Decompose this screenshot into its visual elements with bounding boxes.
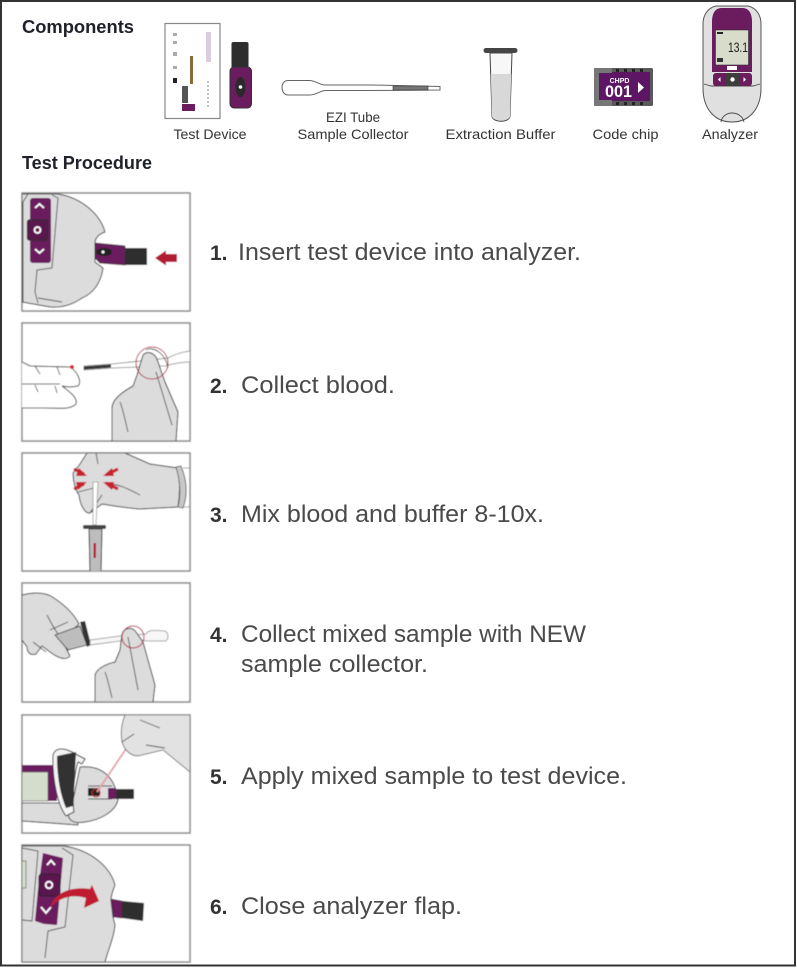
analyzer body <box>22 194 105 307</box>
analyzer buttons <box>35 853 63 925</box>
tilted tube <box>55 621 91 650</box>
step 4 text: Collect mixed sample with NEW <box>241 621 586 648</box>
left hand fingers <box>22 362 80 408</box>
buffer tube <box>83 525 106 572</box>
collector capillary band <box>393 86 428 90</box>
sample collector <box>96 748 126 794</box>
step 2 text: 2. <box>210 375 228 398</box>
arrow: close flap <box>50 885 99 908</box>
step 4 text: sample collector. <box>241 651 428 678</box>
glove cuff <box>176 466 186 508</box>
panel: step 6 illustration <box>22 845 190 962</box>
arrow: insert direction <box>155 250 177 266</box>
panel: step 2 illustration <box>22 323 190 441</box>
test device <box>111 899 144 921</box>
gloved hand <box>73 453 180 513</box>
collector tube drawing <box>282 80 440 95</box>
sample collector <box>90 630 168 645</box>
step 3 text: 3. <box>210 504 228 527</box>
sample collector <box>93 482 98 525</box>
step 3 text: Mix blood and buffer 8-10x. <box>241 501 544 528</box>
panel: step 3 illustration <box>22 453 190 572</box>
step 2 text: Collect blood. <box>241 372 395 399</box>
right hand <box>112 353 178 441</box>
sample collector <box>84 351 190 370</box>
analyzer buttons <box>28 198 51 263</box>
blood drop <box>70 365 74 369</box>
step 4 text <box>210 621 586 678</box>
label: Extraction Buffer: Extraction Buffer <box>446 126 556 142</box>
component: extraction buffer <box>446 48 556 142</box>
chip drawing <box>594 68 653 106</box>
label: Sample Collector: Sample Collector <box>298 126 409 142</box>
buffer tube drawing <box>484 48 518 121</box>
step 6 text: 6. <box>210 896 228 919</box>
magnifier circle <box>136 347 168 379</box>
analyzer LCD <box>22 861 26 888</box>
component: code chip <box>592 68 659 142</box>
panel: step 5 illustration <box>22 715 190 833</box>
label: Test Device: Test Device <box>174 126 247 142</box>
magnifier circle <box>122 626 144 648</box>
label: Analyzer: Analyzer <box>702 126 758 142</box>
step 5 text: Apply mixed sample to test device. <box>241 763 627 790</box>
heading: Components: Components <box>22 17 134 37</box>
step 1 text: 1. <box>210 242 228 265</box>
chip arrow <box>638 82 644 93</box>
step 5 text: 5. <box>210 766 228 789</box>
test device inserted <box>95 243 147 265</box>
chip text: CHPD <box>610 78 629 85</box>
gloved hand <box>121 715 190 772</box>
open flap <box>53 749 85 816</box>
test device cartridge <box>230 42 252 108</box>
label: EZI Tube: EZI Tube <box>326 109 380 125</box>
lower hand <box>95 628 155 702</box>
analyzer base <box>22 765 118 825</box>
component: test device <box>165 24 252 142</box>
step 1 text: Insert test device into analyzer. <box>238 239 581 266</box>
arrows: mix squeeze <box>74 468 118 490</box>
step 4 text: 4. <box>210 624 228 647</box>
chip text: 001 <box>605 83 632 101</box>
panel: step 4 illustration <box>22 583 190 702</box>
test device package card <box>165 24 220 118</box>
left hand holding tube <box>22 593 79 659</box>
analyzer body <box>22 846 115 962</box>
step 6 text: Close analyzer flap. <box>241 893 462 920</box>
component: EZI tube sample collector <box>282 80 440 142</box>
label: Code chip: Code chip <box>592 126 659 142</box>
component: analyzer <box>702 6 761 142</box>
analyzer drawing: 13.1 <box>728 39 748 55</box>
heading: Test Procedure: Test Procedure <box>22 153 152 173</box>
panel: step 1 illustration <box>22 193 190 311</box>
test device in analyzer <box>88 788 134 799</box>
